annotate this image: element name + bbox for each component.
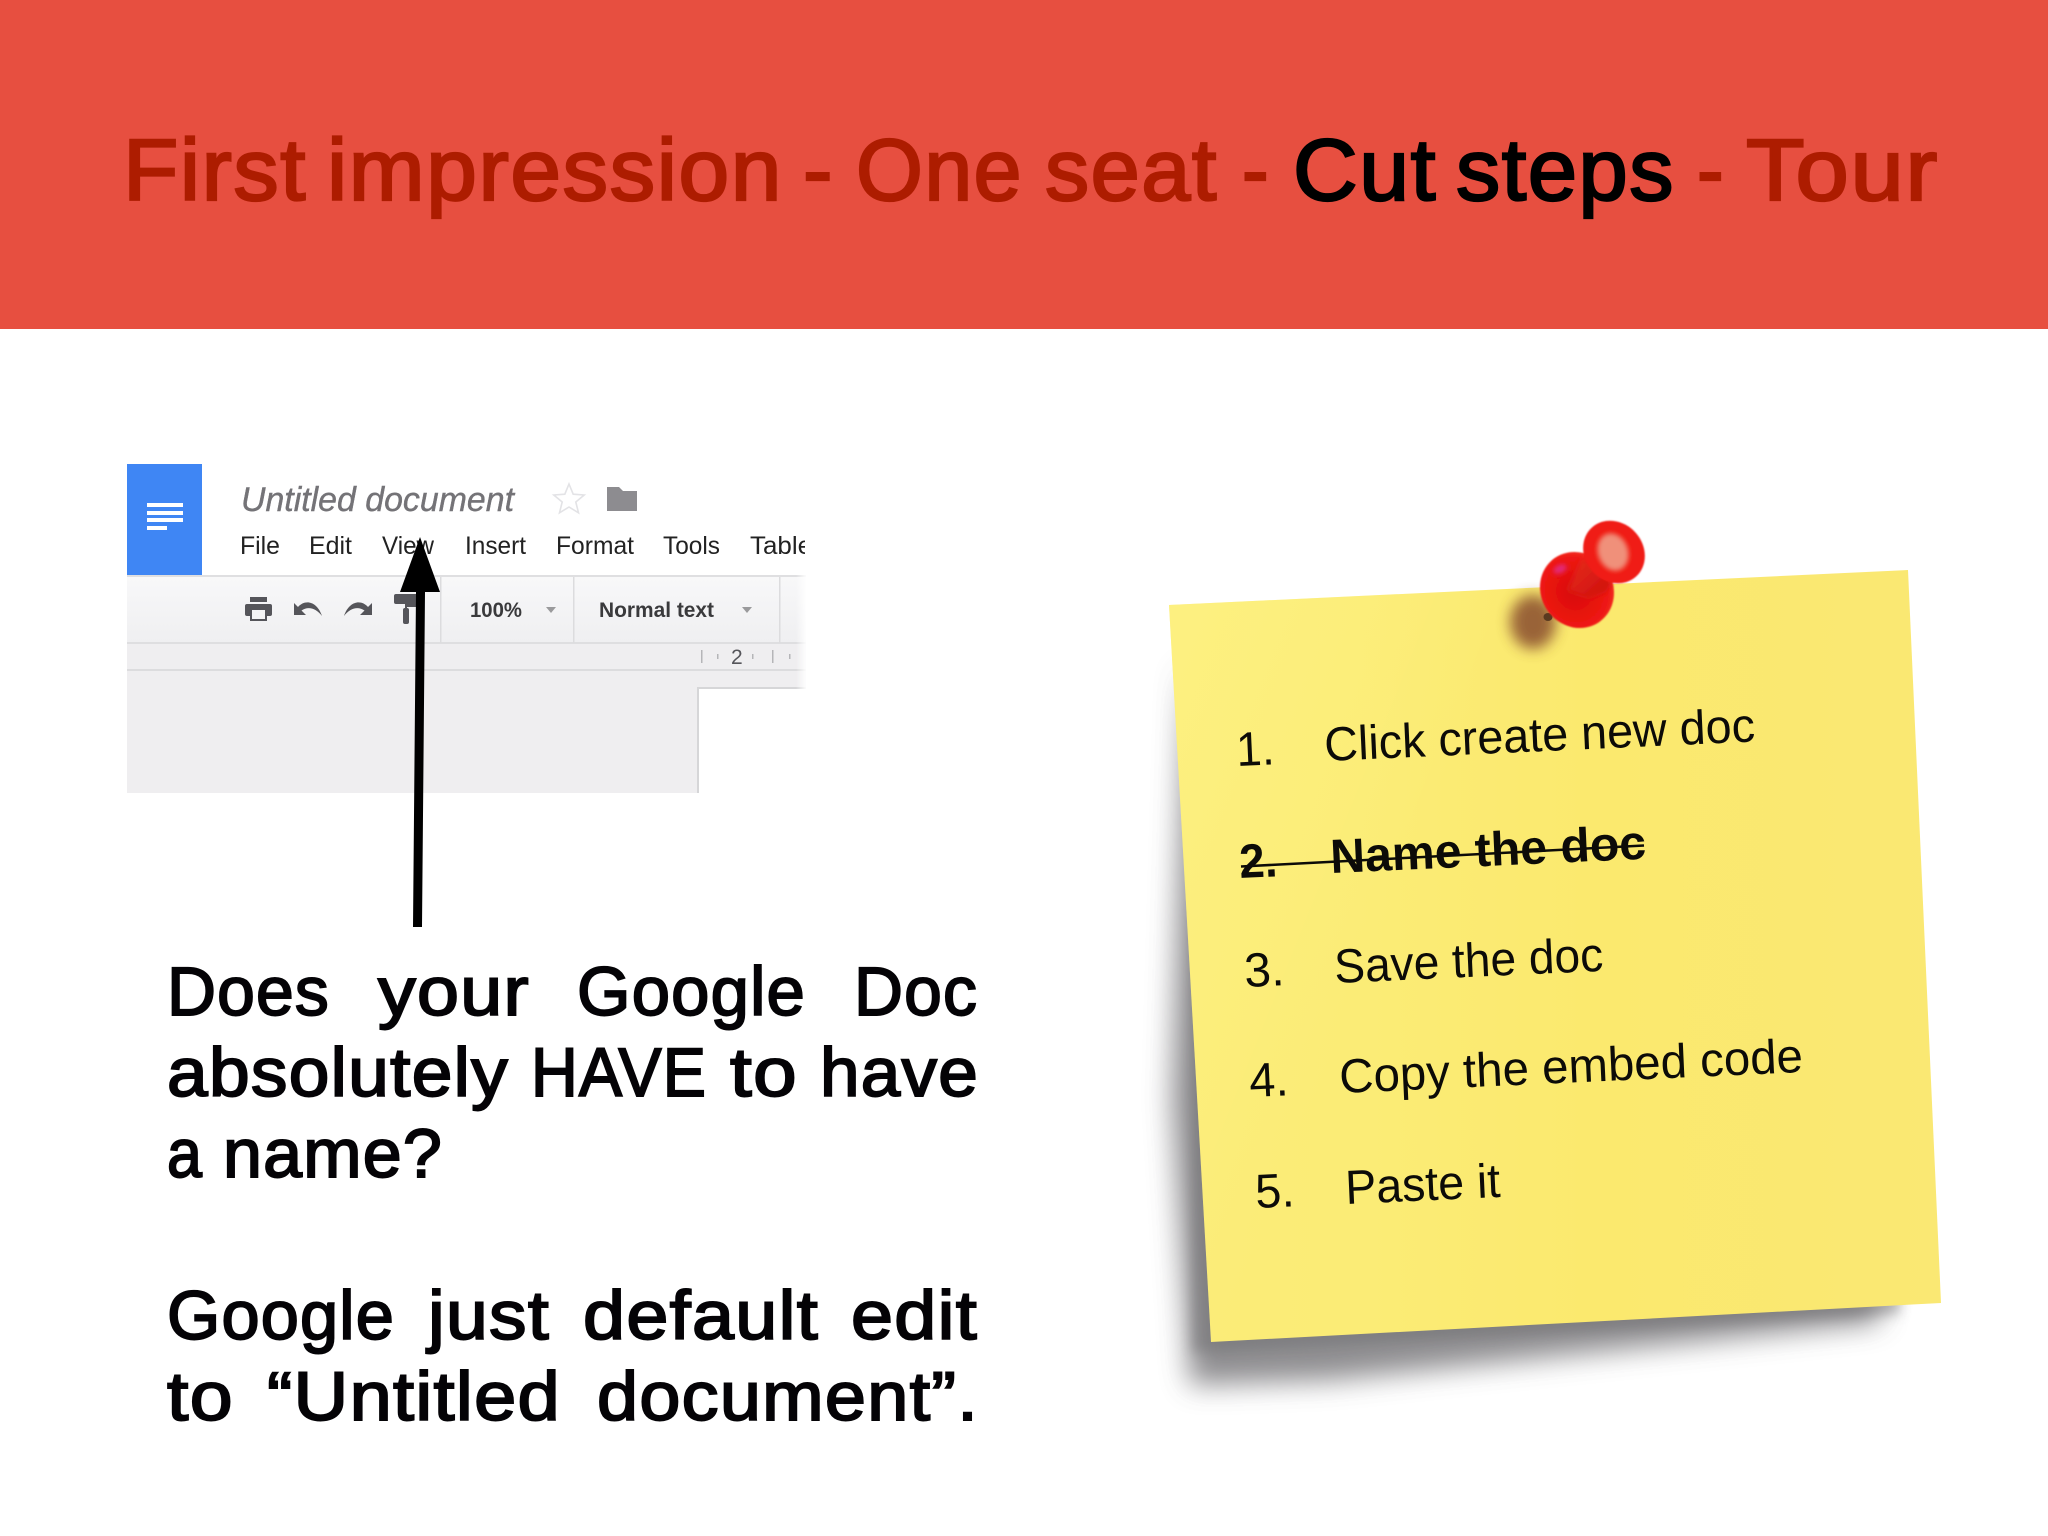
question: Google [577,953,806,1030]
answer: to [167,1358,234,1435]
icon: star [554,484,584,513]
question: absolutely [167,1034,509,1111]
menu bar: View [382,532,435,560]
answer: “Untitled [267,1358,561,1435]
zoom control [470,599,556,622]
toolbar and page background [127,576,806,793]
icon: printer [245,597,272,620]
title: impression [327,122,783,219]
menu bar: Tools [663,532,720,560]
answer: just [426,1277,550,1354]
step 4: 4. [1248,1053,1289,1108]
menu bar: File [240,532,280,560]
step 5: Paste it [1344,1155,1501,1215]
title [123,122,1939,219]
question: your [378,953,530,1030]
pin shadow [1510,595,1556,649]
menu bar: Table [750,532,812,560]
icon: undo [294,602,322,616]
step 2 struck through: Name the doc [1329,817,1647,884]
menu bar [242,536,805,554]
title: seat [1045,122,1218,219]
menu bar: Format [556,532,634,560]
note shadow [1172,660,1900,1385]
answer: Google [167,1277,395,1354]
step 5: 5. [1254,1164,1295,1219]
question: to [730,1034,798,1111]
step 3: 3. [1243,943,1285,998]
icon: docs logo [127,464,202,575]
question: Doc [854,953,978,1030]
style control: Normal text [599,599,714,622]
step 3: Save the doc [1333,929,1604,994]
title: steps [1456,122,1675,219]
step 5 [1254,1155,1501,1219]
Google Docs screenshot [127,464,812,793]
answer: document”. [597,1358,979,1435]
note paper [1169,570,1941,1342]
answer: default [583,1277,819,1354]
question: have [820,1034,979,1111]
zoom control: 100% [470,599,522,622]
icon: folder [607,487,637,511]
question [167,953,979,1192]
question: name? [223,1115,443,1192]
step 4: Copy the embed code [1338,1030,1804,1104]
step 2 struck through: 2. [1238,834,1278,889]
title: - [803,122,834,219]
question: Does [167,953,330,1030]
step 1: Click create new doc [1323,699,1756,772]
menu bar: Edit [309,532,352,560]
answer [167,1277,979,1435]
sticky note [1169,508,1941,1385]
title: Cut [1293,122,1437,219]
title: One [856,122,1023,219]
icon: push pin [1525,508,1658,643]
body text [167,953,979,1435]
question: a [167,1115,203,1192]
title: Tour [1746,122,1939,219]
title: First [123,122,307,219]
ruler: 2 [731,646,743,669]
title: - [1697,122,1725,219]
ruler [701,646,790,669]
icon: redo [344,602,372,616]
icon: paint roller [394,594,424,624]
menu bar: Insert [465,532,526,560]
step 3 [1243,929,1604,998]
header band [0,0,2048,329]
arrow [400,537,440,927]
document title: Untitled document [241,481,516,519]
answer: edit [851,1277,978,1354]
question: HAVE [531,1034,707,1111]
step 1: 1. [1235,722,1275,777]
title: - [1242,122,1270,219]
